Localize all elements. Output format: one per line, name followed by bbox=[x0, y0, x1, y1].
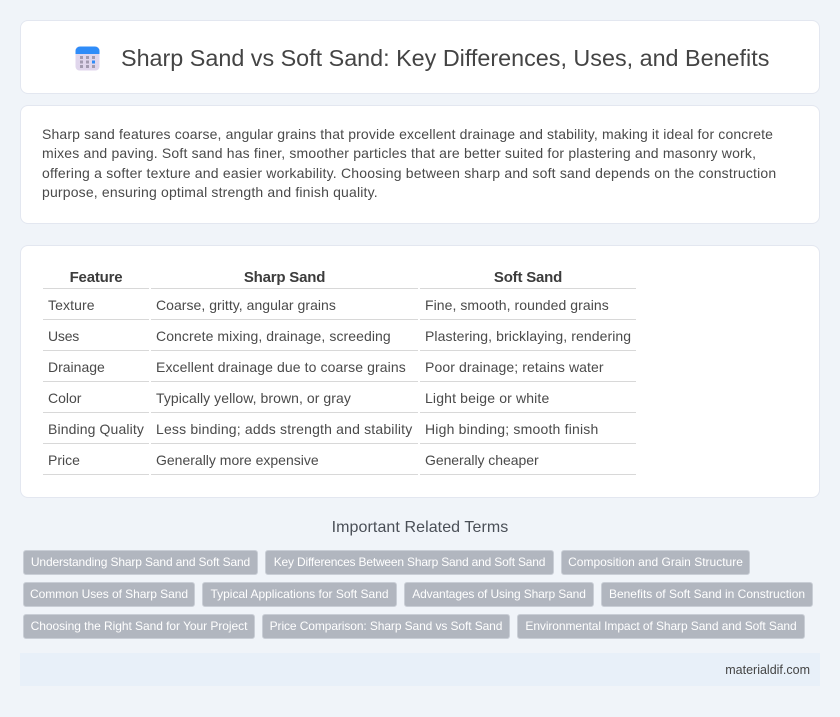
related term tags bbox=[23, 550, 813, 639]
intro text: Sharp sand features coarse, angular grains that provide excellent drainage and stability, making it ideal for concrete bbox=[42, 126, 773, 142]
table header row: Soft Sand bbox=[494, 269, 562, 286]
table row: color bbox=[48, 390, 549, 406]
table row: texture bbox=[48, 297, 609, 313]
related term tags: Understanding Sharp Sand and Soft Sand bbox=[31, 555, 250, 569]
intro text: offering a softer texture and easier workability. Choosing between sharp and soft sand depends on the construction bbox=[42, 164, 776, 180]
table row: texture: Coarse, gritty, angular grains bbox=[156, 297, 336, 313]
icon: calendar bbox=[76, 46, 100, 70]
table row: uses: Uses bbox=[48, 328, 79, 344]
related term tags: Typical Applications for Soft Sand bbox=[210, 587, 389, 601]
table row: binding quality: Less binding; adds strength and stability bbox=[156, 421, 412, 437]
table row: color: Color bbox=[48, 390, 81, 406]
table row: texture: Texture bbox=[48, 297, 95, 313]
related term tags: Common Uses of Sharp Sand bbox=[30, 587, 188, 601]
table row: drainage: Poor drainage; retains water bbox=[425, 359, 604, 375]
footer source: materialdif.com bbox=[725, 663, 810, 677]
panel: introduction bbox=[20, 105, 820, 224]
heading: related terms: Important Related Terms bbox=[332, 519, 508, 536]
table row: uses: Concrete mixing, drainage, screeding bbox=[156, 328, 391, 344]
intro text: mixes and paving. Soft sand has finer, smoother particles that are better suited for plastering and masonry work, bbox=[42, 145, 756, 161]
related term tags: Environmental Impact of Sharp Sand and Soft Sand bbox=[525, 619, 797, 633]
related term tags: Price Comparison: Sharp Sand vs Soft Sand bbox=[270, 619, 502, 633]
table row: binding quality bbox=[48, 421, 598, 437]
related term tags: Key Differences Between Sharp Sand and Soft Sand bbox=[274, 555, 545, 569]
table row: price bbox=[48, 452, 539, 468]
panel: header bbox=[20, 20, 820, 94]
table row: binding quality: Binding Quality bbox=[48, 421, 144, 437]
panel: comparison table bbox=[20, 245, 820, 498]
related term tags: Advantages of Using Sharp Sand bbox=[412, 587, 586, 601]
table header row bbox=[70, 269, 562, 286]
table row: binding quality: High binding; smooth finish bbox=[425, 421, 598, 437]
table header row: Sharp Sand bbox=[244, 269, 325, 286]
table row: uses bbox=[48, 328, 631, 344]
table row: color: Typically yellow, brown, or gray bbox=[156, 390, 351, 406]
table row: price: Price bbox=[48, 452, 80, 468]
intro text bbox=[42, 126, 776, 200]
table row: drainage bbox=[48, 359, 604, 375]
related term tags: Composition and Grain Structure bbox=[568, 555, 743, 569]
table row: color: Light beige or white bbox=[425, 390, 549, 406]
title: Sharp Sand vs Soft Sand: Key Differences, Uses, and Benefits bbox=[121, 45, 769, 71]
table row: price: Generally cheaper bbox=[425, 452, 539, 468]
table row: uses: Plastering, bricklaying, rendering bbox=[425, 328, 631, 344]
table row: texture: Fine, smooth, rounded grains bbox=[425, 297, 609, 313]
table header row: Feature bbox=[70, 269, 122, 286]
table row: drainage: Drainage bbox=[48, 359, 105, 375]
table row: price: Generally more expensive bbox=[156, 452, 319, 468]
table row: drainage: Excellent drainage due to coarse grains bbox=[156, 359, 406, 375]
intro text: purpose, ensuring optimal strength and finish quality. bbox=[42, 184, 378, 200]
footer bar bbox=[20, 653, 820, 686]
related term tags: Benefits of Soft Sand in Construction bbox=[609, 587, 805, 601]
related term tags: Choosing the Right Sand for Your Project bbox=[31, 619, 247, 633]
